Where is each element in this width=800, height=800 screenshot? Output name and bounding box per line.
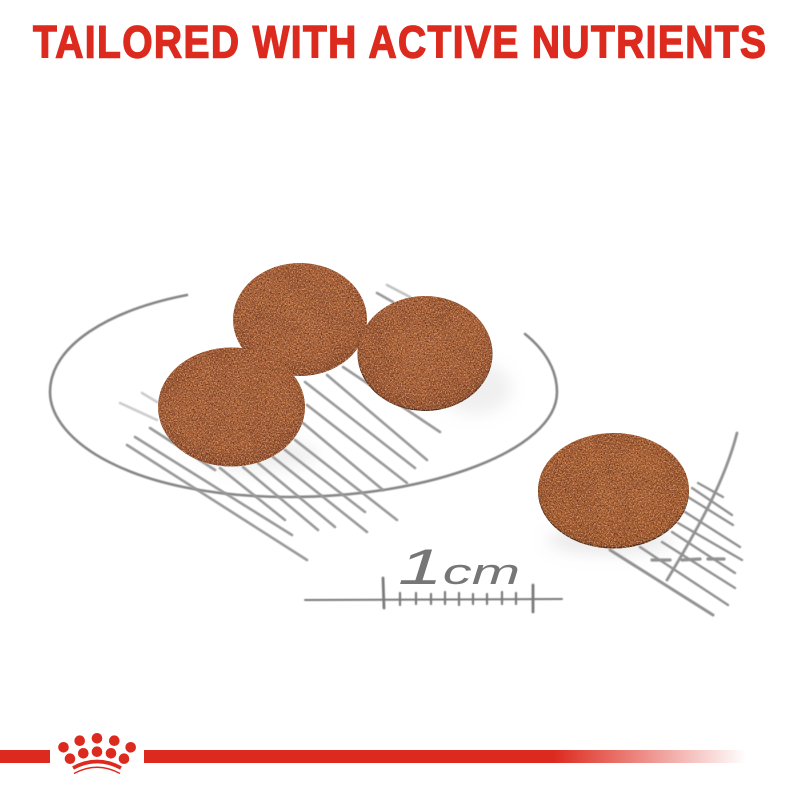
- kibble: single, separate: [538, 433, 689, 548]
- single kibble hatching: [610, 433, 742, 615]
- plate sketch: [50, 295, 557, 497]
- footer rule: right fading: [144, 750, 746, 763]
- footer rule: left: [0, 750, 50, 763]
- kibble shadows: [198, 362, 672, 554]
- icon: crown logo: [58, 733, 136, 774]
- scale label: 1 cm: [398, 539, 520, 595]
- plate hatching: [120, 285, 440, 560]
- kibble: front left: [158, 348, 305, 466]
- kibble: top centre: [233, 263, 367, 376]
- kibble: right on plate: [358, 296, 492, 411]
- size scale: [305, 578, 562, 612]
- title: TAILORED WITH ACTIVE NUTRIENTS: [33, 17, 766, 67]
